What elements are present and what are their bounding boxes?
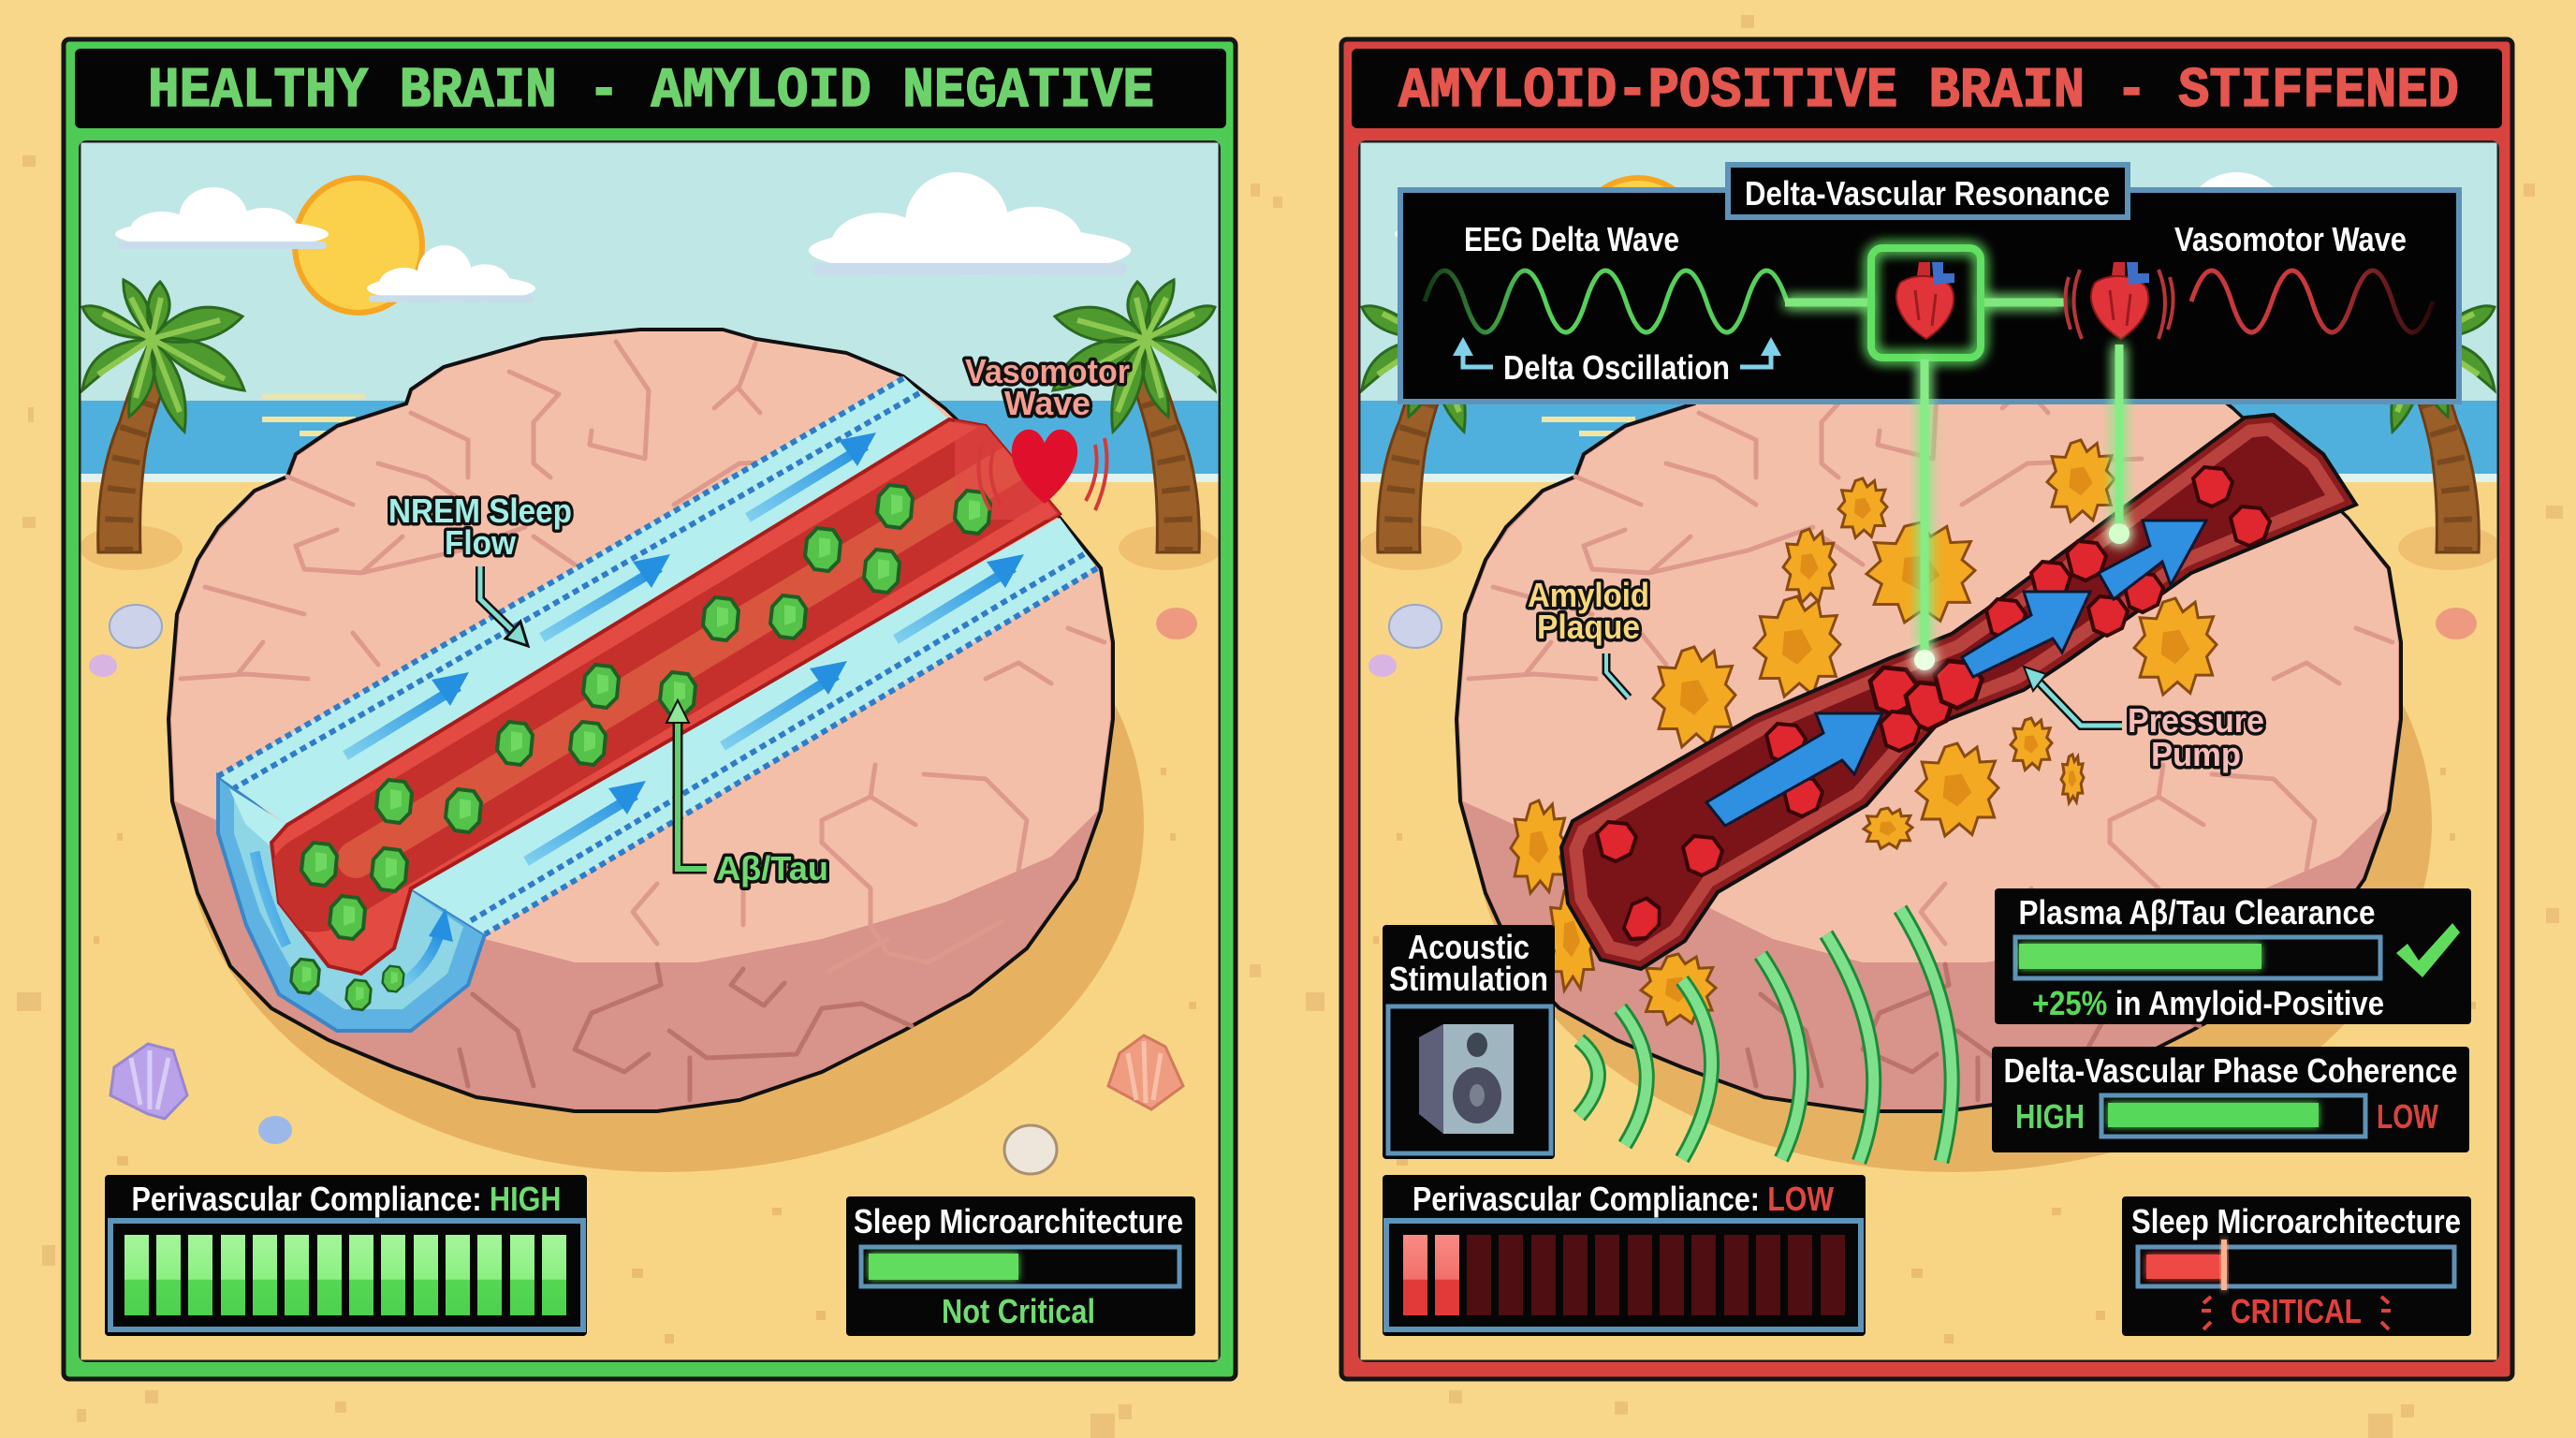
- label: nrem sleep flow: [388, 492, 572, 562]
- panel: sleep microarchitecture critical: [2122, 1196, 2471, 1336]
- panel frame: [1341, 39, 2512, 1379]
- label: vasomotor wave: Wave: [1004, 384, 1090, 422]
- red vasomotor wave: [2191, 271, 2433, 332]
- panel: acoustic stimulation: [1383, 925, 1555, 1159]
- panel: plasma clearance: Plasma Aβ/Tau Clearance: [2018, 893, 2376, 932]
- upper perivascular band: [218, 376, 949, 825]
- shells on sand: [110, 1035, 1183, 1174]
- perivascular inner cap: [234, 791, 463, 1009]
- resonance title tab: [1728, 165, 2128, 217]
- label: amyloid plaque: [1528, 576, 1649, 646]
- pale cap corner: [229, 788, 287, 847]
- panel: amyloid positive brain: [1341, 39, 2512, 1379]
- glowing connectors: [1785, 248, 2064, 358]
- panel: sleep microarchitecture critical: CRITICAL: [2231, 1292, 2362, 1330]
- lower perivascular band: [411, 518, 1097, 934]
- panel: acoustic stimulation: Stimulation: [1389, 960, 1548, 998]
- icon: anatomical heart in box: [1896, 262, 1954, 339]
- icon: check mark: [2396, 923, 2460, 977]
- acoustic sound waves: [1579, 909, 1952, 1162]
- header bar: [75, 49, 1226, 128]
- red blood cells: [1597, 467, 2270, 947]
- arrow: pressure pump: [2024, 667, 2122, 726]
- perivascular space end cap: [218, 776, 485, 1031]
- panel: sleep microarchitecture not critical: [846, 1196, 1195, 1336]
- label: eeg delta wave: EEG Delta Wave: [1464, 220, 1679, 258]
- resonance title tab: Delta-Vascular Resonance: [1745, 174, 2110, 213]
- arrow: nrem label: [480, 566, 528, 646]
- panel: sleep microarchitecture not critical: Not Critical: [942, 1292, 1095, 1330]
- arrow: amyloid label: [1606, 653, 1629, 697]
- eeg green wave: [1425, 271, 1787, 332]
- label: pressure pump: Pressure: [2128, 701, 2264, 740]
- delta oscillation label: [1453, 337, 1781, 387]
- title: HEALTHY BRAIN - AMYLOID NEGATIVE: [148, 60, 1154, 124]
- panel frame: [64, 39, 1236, 1379]
- compliance bars low: [1403, 1235, 1845, 1315]
- icon: pulsing anatomical heart: [2065, 262, 2174, 339]
- panel: phase coherence: [1992, 1047, 2469, 1152]
- panel: plasma clearance: [1995, 888, 2471, 1024]
- label: vasomotor wave: Vasomotor Wave: [2174, 220, 2407, 258]
- brain illustration: [168, 330, 1144, 1172]
- brain illustration: [1456, 330, 2432, 1172]
- label: nrem sleep flow: NREM Sleep: [388, 492, 572, 530]
- panel: phase coherence: LOW: [2377, 1097, 2438, 1136]
- header bar: [1352, 49, 2502, 128]
- panel: perivascular compliance low: Perivascular Compliance: LOW: [1412, 1180, 1834, 1218]
- compliance bars full: [124, 1235, 566, 1315]
- blood vessel: [271, 412, 1076, 974]
- panel: phase coherence: Delta-Vascular Phase Coherence: [2003, 1051, 2458, 1090]
- label: pressure pump: [2128, 701, 2264, 773]
- label: nrem sleep flow: Flow: [445, 523, 517, 562]
- glowing beams into the vessel: [1914, 345, 2130, 670]
- icon: speaker: [1419, 1024, 1514, 1134]
- panel: sleep microarchitecture not critical: Sleep Microarchitecture: [854, 1202, 1183, 1240]
- arrow: amyloid beta callout: [666, 700, 707, 869]
- panel: phase coherence: HIGH: [2015, 1097, 2085, 1136]
- label: amyloid plaque: Amyloid: [1528, 576, 1649, 614]
- amyloid beta tau particles: [291, 485, 990, 1010]
- panel: plasma clearance: +25% in Amyloid-Positive: [2032, 984, 2384, 1022]
- label: amyloid plaque: Plaque: [1537, 608, 1640, 646]
- panel: sleep microarchitecture critical: Sleep Microarchitecture: [2131, 1202, 2461, 1240]
- icon: beating heart: [979, 430, 1106, 510]
- label: vasomotor wave: [965, 352, 1130, 422]
- panel: perivascular compliance high: Perivascular Compliance: HIGH: [131, 1180, 562, 1218]
- amyloid plaques: [1511, 440, 2217, 1024]
- beach scene: [1358, 140, 2501, 1367]
- panel: healthy brain: [64, 39, 1236, 1379]
- stiffened blood vessel: [1561, 415, 2356, 969]
- blue pressure arrows: [1706, 521, 2206, 826]
- label: pressure pump: Pump: [2151, 735, 2241, 773]
- blue flow arrows: [255, 433, 1024, 985]
- title: AMYLOID-POSITIVE BRAIN - STIFFENED: [1398, 60, 2459, 124]
- panel: delta-vascular resonance: [1400, 165, 2459, 402]
- beach scene: [79, 140, 1222, 1367]
- panel: perivascular compliance low: [1383, 1175, 1866, 1336]
- label: amyloid beta tau: Aβ/Tau: [716, 849, 828, 888]
- label: vasomotor wave: Vasomotor: [965, 352, 1130, 390]
- panel: perivascular compliance high: [105, 1175, 587, 1336]
- panel: acoustic stimulation: Acoustic: [1408, 928, 1530, 966]
- delta oscillation label: Delta Oscillation: [1503, 348, 1730, 387]
